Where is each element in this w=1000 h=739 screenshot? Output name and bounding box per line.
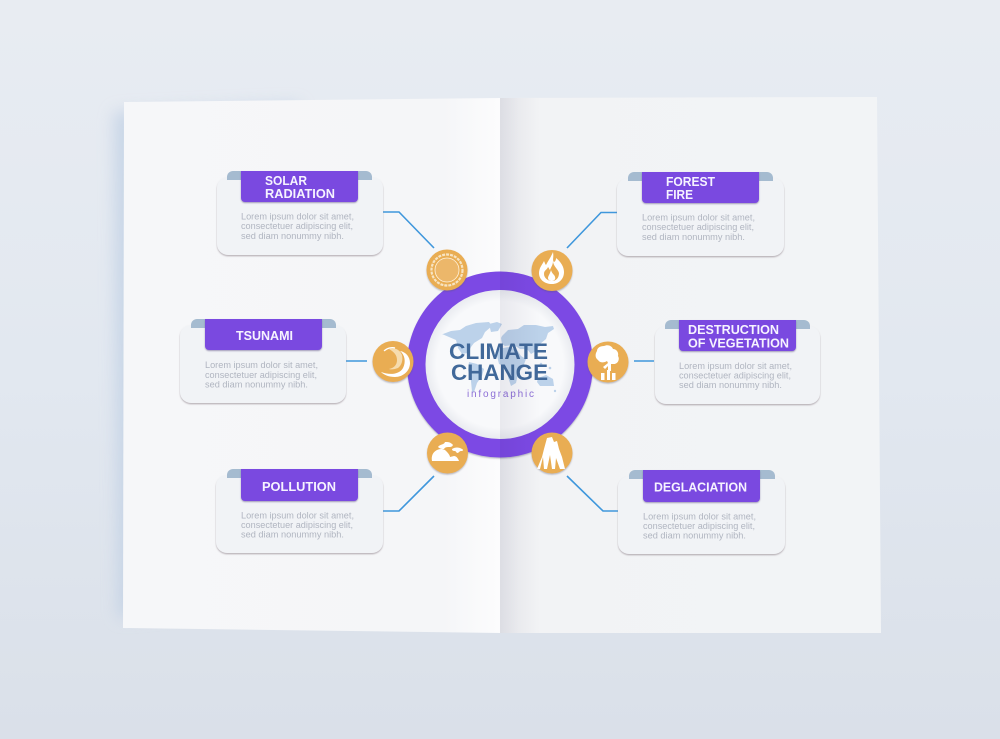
body text: forest fire: Lorem ipsum dolor sit amet,	[642, 212, 755, 224]
heading banner: solar radiation	[241, 171, 358, 202]
title: climate change infographic: infographic	[467, 389, 534, 400]
panel: solar radiation	[217, 171, 383, 255]
body text: pollution: sed diam nonummy nibh.	[241, 530, 344, 540]
body text: deglaciation: Lorem ipsum dolor sit amet,	[643, 512, 756, 522]
body text: destruction of vegetation	[679, 361, 792, 391]
heading banner: destruction of vegetation: DESTRUCTION	[688, 322, 779, 337]
body text: forest fire: sed diam nonummy nibh.	[642, 232, 745, 243]
panel: tsunami	[180, 319, 346, 403]
body text: solar radiation: Lorem ipsum dolor sit amet,	[241, 212, 354, 222]
heading banner: pollution	[241, 469, 358, 501]
panel: destruction of vegetation	[655, 320, 820, 404]
body text: solar radiation: consectetuer adipiscing elit,	[241, 221, 353, 232]
heading banner: forest fire: FOREST	[666, 174, 715, 189]
icon: pollution	[427, 432, 468, 474]
title: climate change infographic	[449, 339, 548, 400]
body text: deglaciation: consectetuer adipiscing elit,	[643, 521, 755, 532]
heading banner: deglaciation: DEGLACIATION	[654, 480, 747, 494]
body text: pollution: Lorem ipsum dolor sit amet,	[241, 510, 354, 522]
body text: destruction of vegetation: consectetuer adipiscing elit,	[679, 370, 791, 382]
body text: tsunami	[205, 360, 318, 390]
icon: wave	[372, 341, 414, 382]
body text: deglaciation: sed diam nonummy nibh.	[643, 530, 746, 542]
body text: solar radiation: sed diam nonummy nibh.	[241, 231, 344, 242]
paper fold shading	[500, 98, 540, 633]
title: climate change infographic: CLIMATE	[449, 339, 548, 364]
body text: tsunami: consectetuer adipiscing elit,	[205, 370, 317, 381]
connector lines	[346, 212, 654, 511]
icon: sun	[426, 250, 468, 290]
body text: forest fire: consectetuer adipiscing elit,	[642, 222, 754, 233]
title: climate change infographic: CHANGE	[451, 360, 548, 385]
panel: forest fire	[617, 172, 784, 256]
heading banner: tsunami	[205, 319, 322, 350]
body text: forest fire	[642, 212, 755, 243]
heading banner: destruction of vegetation	[679, 320, 796, 351]
body text: destruction of vegetation: Lorem ipsum dolor sit amet,	[679, 361, 792, 372]
heading banner: destruction of vegetation: OF VEGETATION	[688, 336, 789, 350]
icon: glacier	[532, 432, 572, 474]
heading banner: forest fire	[642, 172, 759, 203]
world map	[442, 322, 556, 392]
paper sheet	[114, 97, 881, 633]
panel: pollution	[216, 469, 383, 553]
body text: tsunami: Lorem ipsum dolor sit amet,	[205, 360, 318, 371]
body text: pollution: consectetuer adipiscing elit,	[241, 520, 353, 531]
body text: destruction of vegetation: sed diam nonummy nibh.	[679, 380, 782, 391]
icon: flame	[532, 250, 572, 291]
body text: deglaciation	[643, 512, 756, 542]
heading banner: forest fire: FIRE	[666, 187, 693, 202]
icon: tree	[588, 342, 628, 382]
body text: tsunami: sed diam nonummy nibh.	[205, 380, 308, 390]
body text: pollution	[241, 510, 354, 540]
body text: solar radiation	[241, 212, 354, 242]
heading banner: tsunami: TSUNAMI	[236, 328, 293, 343]
heading banner: pollution: POLLUTION	[262, 479, 336, 494]
heading banner: deglaciation	[643, 470, 760, 502]
panel: deglaciation	[618, 470, 785, 554]
central ring	[407, 272, 593, 458]
heading banner: solar radiation: SOLAR	[265, 173, 308, 188]
heading banner: solar radiation: RADIATION	[265, 186, 335, 201]
